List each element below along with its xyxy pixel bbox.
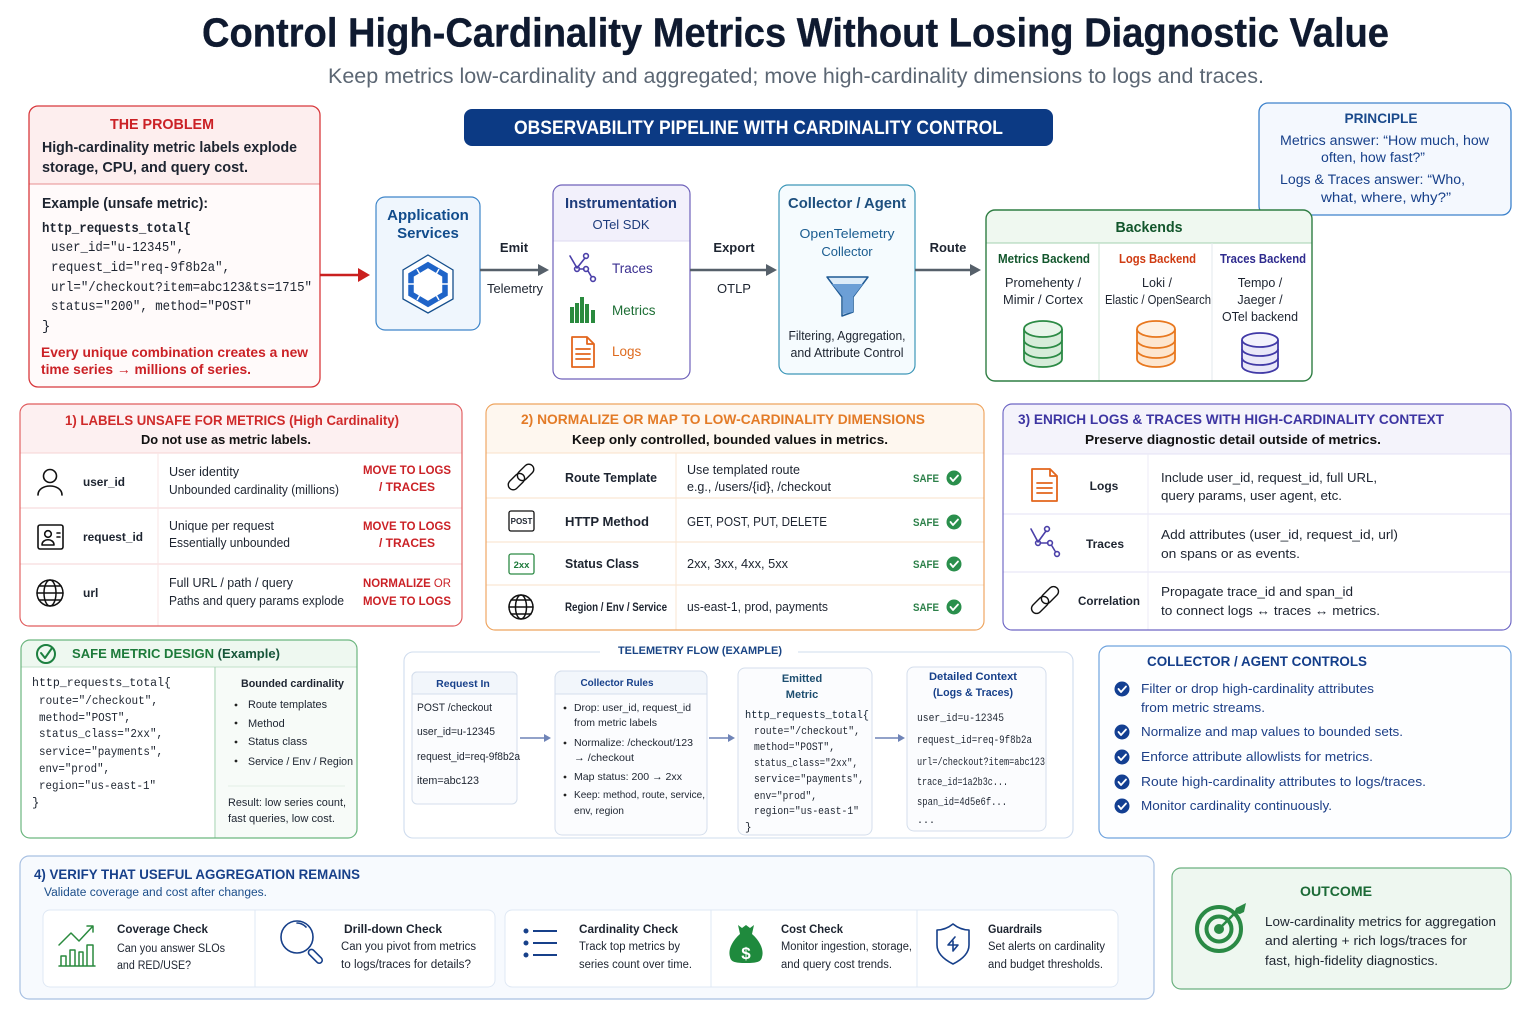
box: emitted metric: Emitted [782, 673, 822, 685]
traces backend: Jaeger / [1237, 293, 1283, 307]
heading: COLLECTOR / AGENT CONTROLS [1147, 654, 1367, 669]
row: user_id: user_id [83, 475, 125, 489]
heading: Keep only controlled, bounded values in metrics. [572, 432, 888, 447]
unsafe metric code: url="/checkout?item=abc123&ts=1715" [51, 280, 312, 296]
arrow: export OTLP [690, 240, 777, 296]
check: cardinality: series count over time. [579, 959, 692, 971]
icon: 2xx box: 2xx [514, 560, 530, 571]
box: detailed context: span_id=4d5e6f... [917, 797, 1007, 809]
safe metric code: route="/checkout", [39, 694, 158, 708]
title: Control High-Cardinality Metrics Without Losing Diagnostic Value [202, 10, 1389, 56]
metrics backend: Promehenty / [1005, 276, 1082, 290]
box: emitted metric: Metric [786, 689, 818, 701]
row: url: url [83, 586, 98, 600]
panel: telemetry flow [404, 645, 1073, 838]
heading [1018, 412, 1445, 447]
row: user_id: MOVE TO LOGS [363, 463, 451, 477]
row: region env service [509, 595, 962, 619]
metrics backend: Metrics Backend [998, 252, 1090, 266]
pipeline banner [464, 109, 1053, 146]
panel: collector agent: Collector [821, 244, 873, 259]
safe metric code: region="us-east-1" [39, 779, 156, 793]
panel: labels unsafe for metrics [20, 404, 462, 626]
traces backend [1220, 252, 1306, 373]
bounded cardinality list: Bounded cardinality [241, 678, 345, 690]
icon: money bag: $ [741, 944, 751, 963]
icon: shield [937, 924, 969, 964]
unsafe metric code: http_requests_total{ [42, 221, 191, 237]
control: filter or drop: Filter or drop high-cardinality attributes [1141, 681, 1375, 696]
heading: THE PROBLEM [110, 116, 214, 133]
panel: collector agent controls [1099, 646, 1511, 838]
safe metric code: status_class="2xx", [39, 727, 163, 741]
check: guardrails: and budget thresholds. [988, 959, 1103, 971]
heading: OUTCOME [1300, 883, 1372, 899]
row: correlation: Correlation [1078, 594, 1140, 608]
panel: instrumentation: Metrics [612, 303, 656, 318]
row: http method [509, 511, 962, 531]
row: correlation [1029, 584, 1380, 618]
heading: Preserve diagnostic detail outside of metrics. [1085, 432, 1381, 447]
row: http method: GET, POST, PUT, DELETE [687, 515, 827, 529]
check: coverage: and RED/USE? [117, 960, 191, 972]
arrow [709, 734, 735, 742]
check: drill-down: Drill-down Check [344, 924, 443, 936]
icon: safe check [946, 470, 962, 486]
row: url: NORMALIZE OR [363, 576, 451, 590]
panel: outcome [1172, 868, 1511, 989]
check: coverage [59, 924, 225, 972]
panel: collector agent: Collector / Agent [788, 195, 906, 212]
box: collector rules: Drop: user_id, request_id [574, 702, 691, 714]
panel: enrich logs and traces [1003, 404, 1511, 630]
logs backend: Logs Backend [1119, 252, 1196, 266]
box: emitted metric: service="payments", [754, 774, 864, 786]
row: user_id: / TRACES [379, 480, 435, 494]
box: detailed context: Detailed Context [929, 671, 1017, 683]
subtitle: Keep metrics low-cardinality and aggregated; move high-cardinality dimensions to logs and traces. [328, 65, 1264, 88]
control: normalize: Normalize and map values to bounded sets. [1141, 724, 1403, 739]
panel: collector agent: OpenTelemetry [800, 226, 895, 241]
check: guardrails: Guardrails [988, 924, 1042, 936]
problem statement [42, 139, 297, 176]
row: status class [509, 554, 962, 574]
row: logs [1032, 469, 1377, 503]
row: region env service: us-east-1, prod, payments [687, 600, 828, 614]
panel: instrumentation: OTel SDK [592, 217, 650, 232]
box: collector rules: → /checkout [574, 752, 634, 764]
arrow: export OTLP: OTLP [717, 281, 751, 296]
problem statement: High-cardinality metric labels explode [42, 139, 297, 156]
control: filter or drop: from metric streams. [1141, 700, 1265, 715]
panel: verify aggregation [20, 856, 1154, 999]
row: route template: Route Template [565, 471, 657, 485]
row: route template [506, 462, 962, 494]
heading: 3) ENRICH LOGS & TRACES WITH HIGH-CARDINALITY CONTEXT [1018, 412, 1445, 427]
box: detailed context: ... [917, 816, 935, 827]
metrics backend [998, 252, 1090, 367]
check: drill-down [281, 921, 476, 971]
box: emitted metric: method="POST", [754, 742, 835, 754]
check: guardrails: Set alerts on cardinality [988, 941, 1105, 953]
box: detailed context [907, 667, 1046, 831]
safe metric code: service="payments", [39, 745, 163, 759]
row: traces: on spans or as events. [1161, 546, 1300, 561]
warning [41, 344, 308, 377]
icon: id card [38, 525, 63, 549]
icon: link [1029, 584, 1061, 616]
panel: principle: what, where, why?” [1320, 190, 1451, 205]
unsafe metric code: request_id="req-9f8b2a", [51, 260, 230, 276]
row: correlation: to connect logs ↔ traces ↔ metrics. [1161, 603, 1380, 618]
check: cost: and query cost trends. [781, 959, 892, 971]
row: url: Full URL / path / query [169, 576, 294, 590]
traces backend: Tempo / [1238, 276, 1283, 290]
icon: link [506, 462, 536, 492]
icon: metrics bars [570, 297, 595, 323]
heading: Validate coverage and cost after changes. [44, 887, 267, 899]
result note: fast queries, low cost. [228, 813, 335, 825]
row: request_id: Unique per request [169, 519, 275, 533]
problem statement: storage, CPU, and query cost. [42, 159, 248, 176]
arrow: problem to application [320, 268, 370, 282]
icon: POST box: POST [511, 517, 533, 526]
row: http method: SAFE [913, 517, 939, 529]
outcome text: Low-cardinality metrics for aggregation [1265, 914, 1496, 929]
row: traces [1031, 527, 1398, 561]
warning: Every unique combination creates a new [41, 344, 308, 360]
box: emitted metric: env="prod", [754, 791, 817, 803]
panel: backends [986, 210, 1312, 381]
panel: collector agent [779, 185, 915, 374]
box: collector rules: Keep: method, route, service, [574, 789, 705, 801]
row: url: Paths and query params explode [169, 594, 344, 608]
icon: check circle [37, 645, 55, 663]
panel: the problem [29, 106, 320, 387]
panel: application services: Services [397, 225, 459, 242]
unsafe metric code: user_id="u-12345", [51, 240, 184, 256]
bounded cardinality list: Route templates [248, 699, 327, 711]
row: http method: HTTP Method [565, 515, 649, 529]
check: cardinality: Track top metrics by [579, 941, 680, 953]
check: drill-down: Can you pivot from metrics [341, 941, 476, 953]
arrow [875, 734, 905, 742]
panel: application services: Application [387, 207, 469, 224]
row: route template: e.g., /users/{id}, /checkout [687, 480, 832, 494]
panel: principle: PRINCIPLE [1344, 110, 1418, 126]
panel: collector agent: Filtering, Aggregation, [788, 329, 906, 343]
row: user_id: User identity [169, 465, 240, 479]
metrics backend: Mimir / Cortex [1003, 293, 1084, 307]
icon: log document [1032, 469, 1057, 501]
icon: list [524, 930, 557, 956]
icon: magnifier [281, 921, 323, 964]
box: emitted metric: route="/checkout", [754, 726, 860, 738]
box: emitted metric [738, 668, 872, 835]
row: region env service: SAFE [913, 602, 939, 614]
logs backend: Elastic / OpenSearch [1105, 293, 1211, 307]
panel: application services [376, 197, 480, 330]
row: route template: Use templated route [687, 463, 800, 477]
icon: safe check [946, 600, 962, 614]
heading [65, 413, 399, 447]
warning: time series → millions of series. [41, 361, 251, 377]
box: request in: POST /checkout [417, 702, 492, 714]
row: request_id: MOVE TO LOGS [363, 519, 451, 533]
arrow [520, 734, 551, 742]
check: coverage: Can you answer SLOs [117, 943, 225, 955]
heading: 2) NORMALIZE OR MAP TO LOW-CARDINALITY DIMENSIONS [521, 412, 925, 427]
logs backend [1105, 252, 1211, 367]
row: url [37, 576, 451, 608]
icon: safe check [946, 514, 962, 530]
icon: target [1197, 903, 1246, 951]
row: logs: Include user_id, request_id, full URL, [1161, 470, 1377, 485]
box: request in [412, 672, 521, 804]
arrow: route [915, 240, 981, 276]
arrow: emit telemetry: Emit [500, 240, 529, 255]
box: emitted metric: http_requests_total{ [745, 710, 869, 722]
row: url: MOVE TO LOGS [363, 594, 451, 608]
control: route: Route high-cardinality attributes to logs/traces. [1141, 774, 1426, 789]
box: collector rules: from metric labels [574, 717, 657, 729]
logs backend: Loki / [1142, 276, 1172, 290]
check: coverage: Coverage Check [117, 924, 209, 936]
control: filter or drop [1114, 681, 1375, 715]
icon: traces [1031, 527, 1059, 556]
panel: normalize to low cardinality [486, 404, 984, 630]
box: collector rules [555, 671, 707, 835]
box: collector rules: Map status: 200 → 2xx [574, 771, 683, 783]
row: request_id [38, 519, 451, 550]
heading: Do not use as metric labels. [141, 432, 311, 447]
heading: 4) VERIFY THAT USEFUL AGGREGATION REMAINS [34, 867, 360, 882]
panel: instrumentation: Instrumentation [565, 195, 677, 212]
panel: instrumentation: Traces [612, 261, 653, 276]
row: traces: Traces [1086, 537, 1124, 551]
box: detailed context: url=/checkout?item=abc123 [917, 757, 1045, 769]
panel: collector agent: and Attribute Control [790, 346, 904, 360]
row: route template: SAFE [913, 473, 939, 485]
row: logs: Logs [1090, 479, 1119, 493]
icon: growth chart [59, 926, 95, 966]
panel: safe metric design [21, 640, 357, 838]
unsafe metric code [42, 221, 312, 335]
box: emitted metric: } [745, 822, 752, 834]
safe metric code: } [32, 796, 39, 810]
check: cost [729, 924, 912, 971]
result note [228, 797, 346, 825]
check: cardinality [524, 924, 692, 971]
box: collector rules: env, region [574, 805, 624, 817]
check: guardrails [937, 924, 1105, 971]
arrow: export OTLP: Export [713, 240, 755, 255]
heading [521, 412, 925, 447]
box: request in: request_id=req-9f8b2a [417, 751, 521, 763]
box: collector rules: Normalize: /checkout/123 [574, 737, 693, 749]
safe metric code: http_requests_total{ [32, 676, 171, 690]
panel: backends: Backends [1116, 219, 1182, 236]
icon: log document [572, 337, 594, 367]
check: cost: Monitor ingestion, storage, [781, 941, 912, 953]
heading: TELEMETRY FLOW (EXAMPLE) [618, 645, 782, 657]
row: logs: query params, user agent, etc. [1161, 488, 1342, 503]
box: request in: item=abc123 [417, 775, 479, 787]
control: allowlists: Enforce attribute allowlists for metrics. [1141, 749, 1373, 764]
unsafe metric code: } [42, 319, 50, 335]
box: detailed context: request_id=req-9f8b2a [917, 735, 1032, 747]
safe metric code: method="POST", [39, 711, 131, 725]
panel: principle: Metrics answer: “How much, how [1280, 133, 1489, 148]
check: drill-down: to logs/traces for details? [341, 959, 471, 971]
pipeline banner: OBSERVABILITY PIPELINE WITH CARDINALITY CONTROL [514, 118, 1003, 139]
unsafe metric code: status="200", method="POST" [51, 299, 252, 315]
outcome text: fast, high-fidelity diagnostics. [1265, 953, 1438, 968]
panel: principle [1259, 103, 1511, 215]
row: region env service: Region / Env / Service [565, 602, 667, 614]
icon: POST box [509, 511, 534, 531]
example heading: Example (unsafe metric): [42, 196, 208, 212]
icon: orange database [1137, 321, 1175, 367]
safe metric code [32, 676, 171, 810]
bounded cardinality list [235, 678, 353, 768]
box: detailed context: user_id=u-12345 [917, 713, 1004, 725]
control: monitor: Monitor cardinality continuously. [1141, 798, 1332, 813]
box: emitted metric: region="us-east-1" [754, 806, 859, 818]
heading: SAFE METRIC DESIGN (Example) [72, 646, 280, 661]
icon: money bag [729, 925, 763, 963]
box: request in: user_id=u-12345 [417, 726, 495, 738]
row: user_id [38, 463, 451, 497]
box: detailed context: trace_id=1a2b3c... [917, 777, 1008, 789]
panel: principle: Logs & Traces answer: “Who, [1280, 172, 1465, 187]
bounded cardinality list: Method [248, 718, 285, 730]
bounded cardinality list: Status class [248, 736, 308, 748]
panel: instrumentation: Logs [612, 344, 642, 359]
check: cost: Cost Check [781, 924, 844, 936]
icon: funnel [827, 277, 868, 316]
row: status class: SAFE [913, 559, 939, 571]
icon: hexagon [403, 255, 453, 313]
row: status class: 2xx, 3xx, 4xx, 5xx [687, 557, 789, 571]
row: traces: Add attributes (user_id, request_id, url) [1161, 527, 1398, 542]
row: request_id: Essentially unbounded [169, 536, 290, 550]
outcome text: and alerting + rich logs/traces for [1265, 933, 1468, 948]
icon: safe check [946, 556, 962, 572]
heading [34, 867, 360, 899]
arrow: emit telemetry: Telemetry [487, 281, 543, 296]
bounded cardinality list: Service / Env / Region [248, 756, 353, 768]
icon: green database [1024, 321, 1062, 367]
icon: globe [37, 580, 63, 606]
row: request_id: request_id [83, 530, 143, 544]
icon: purple database [1242, 333, 1278, 373]
box: emitted metric: status_class="2xx", [754, 758, 858, 770]
icon: traces [570, 254, 595, 281]
icon: globe [509, 595, 533, 619]
row: request_id: / TRACES [379, 536, 435, 550]
box: request in: Request In [436, 678, 490, 690]
row: status class: Status Class [565, 557, 639, 571]
outcome text [1265, 914, 1496, 968]
arrow: emit telemetry [480, 240, 549, 296]
row: correlation: Propagate trace_id and span_id [1161, 584, 1353, 599]
icon: person [38, 470, 62, 495]
panel: principle: often, how fast?” [1321, 150, 1425, 165]
box: detailed context: (Logs & Traces) [933, 687, 1013, 699]
arrow: route: Route [930, 240, 966, 255]
traces backend: OTel backend [1222, 310, 1298, 324]
box: collector rules: Collector Rules [580, 677, 654, 689]
check: cardinality: Cardinality Check [579, 924, 679, 936]
result note: Result: low series count, [228, 797, 346, 809]
panel: instrumentation [553, 185, 690, 379]
traces backend: Traces Backend [1220, 252, 1306, 266]
icon: 2xx box [509, 554, 534, 574]
safe metric code: env="prod", [39, 762, 110, 776]
heading: 1) LABELS UNSAFE FOR METRICS (High Cardinality) [65, 413, 399, 428]
row: user_id: Unbounded cardinality (millions) [169, 483, 339, 497]
